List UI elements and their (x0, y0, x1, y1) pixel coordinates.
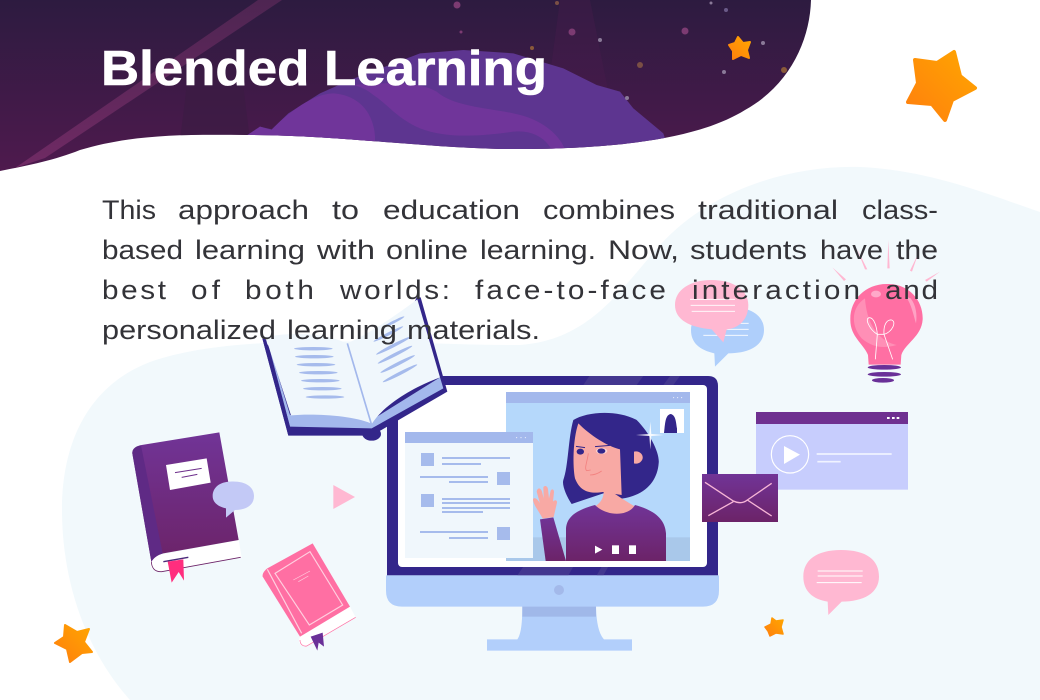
header banner (0, 0, 830, 175)
body text: learning (195, 235, 305, 265)
body text: learning (287, 315, 397, 345)
icon: bottom left star (55, 625, 92, 662)
icon: light bulb (832, 240, 940, 383)
monitor frame (387, 376, 718, 575)
body text (102, 195, 938, 345)
background blob (62, 167, 1040, 700)
body text: materials. (407, 315, 540, 345)
body text: class- (862, 195, 938, 225)
body text: learning. (480, 235, 596, 265)
document window (405, 432, 533, 558)
body text: of (191, 275, 220, 306)
pink chat bubble lower (803, 550, 879, 615)
pink chat bubble (675, 280, 748, 342)
lavender chat bubble (213, 482, 254, 518)
monitor chin (386, 575, 719, 607)
video controls (595, 545, 636, 554)
icon: small bottom star (765, 618, 783, 636)
icon: small star in header (729, 37, 750, 59)
body text: Now, (608, 235, 679, 265)
books and small shapes (132, 432, 356, 651)
body text: the (896, 235, 938, 265)
pink book (263, 543, 356, 651)
body text: to (332, 195, 359, 225)
body text: traditional (698, 195, 838, 225)
body text: best (102, 275, 166, 306)
title: Blended Learning (101, 42, 547, 96)
body text: both (245, 275, 314, 306)
body text: online (386, 235, 468, 265)
right side elements (675, 240, 940, 615)
body text: worlds: (339, 275, 450, 306)
video call window (506, 392, 690, 561)
purple book (132, 432, 242, 583)
envelope (702, 474, 778, 522)
play triangle (333, 485, 355, 509)
monitor stand (487, 603, 632, 651)
body text: interaction (692, 275, 860, 306)
monitor (386, 376, 719, 651)
body text: education (383, 195, 520, 225)
body text: have (820, 235, 883, 265)
icon: large star (908, 52, 975, 120)
video player card (756, 412, 908, 490)
body text: face-to-face (475, 275, 666, 306)
space dots (454, 1, 787, 100)
body text: combines (543, 195, 675, 225)
body text: approach (178, 195, 309, 225)
body text: students (690, 235, 807, 265)
mountain (245, 50, 670, 153)
person (533, 413, 666, 561)
body text: personalized (102, 315, 276, 345)
avatar thumbnail (660, 409, 684, 433)
sparkle (636, 422, 664, 449)
blue chat bubble (691, 307, 764, 367)
screen (398, 385, 707, 567)
body text: based (102, 235, 183, 265)
body text: This (102, 195, 156, 225)
body text: with (316, 235, 375, 265)
open book (262, 297, 447, 441)
body text: and (885, 275, 938, 306)
